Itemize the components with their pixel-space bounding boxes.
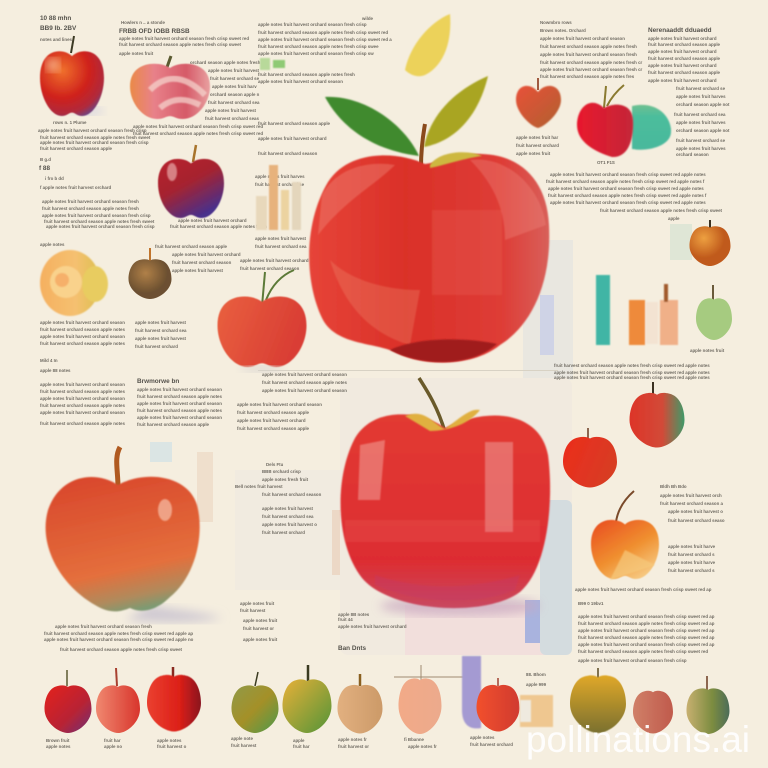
- text: heart apple caption: fruit harvest orchard: [516, 143, 559, 148]
- text: centre left paragraph: apple notes fruit harvest orchard: [237, 418, 306, 423]
- apple: small orange: [690, 220, 730, 266]
- text: bottom row captions: fi Bbanne: [404, 737, 425, 742]
- text: left middle paragraph: fruit harvest orchard season apple notes: [40, 327, 125, 332]
- text: top right paragraph A: apple notes fruit harvest orchard season fresh: [540, 52, 637, 57]
- text: top centre paragraph: apple notes fruit harvest orchard season: [258, 79, 343, 84]
- text: right lower paragraphs: apple notes fruit harve: [668, 544, 716, 549]
- text: second column heading and paragraph: FRBB OFD IOBB RBSB: [119, 28, 190, 35]
- text: right lower paragraphs: fruit harvest orchard s: [668, 552, 715, 557]
- text: bottom row captions: fruit har: [293, 744, 310, 749]
- text: top right paragraph A: Nowmbro rows: [540, 20, 572, 25]
- text: bottom row captions: apple: [293, 738, 305, 743]
- text: centre callout beside lower apple: apple notes fresh fruit: [262, 477, 309, 482]
- text: purple apple caption: apple notes fruit harvest orchard: [178, 218, 247, 223]
- apple: red green: [630, 382, 684, 448]
- apple: red with blue base: [40, 36, 104, 116]
- text: top right paragraph B: fruit harvest orchard se: [676, 138, 726, 143]
- text: top right paragraph A: Brows notes. Orchard: [540, 28, 586, 33]
- text: centre left paragraph: Brwmorwe bn: [137, 378, 179, 385]
- text: right lower paragraphs: apple notes fruit harvest orch: [660, 493, 722, 498]
- text: top centre paragraph: apple notes fruit harves: [255, 174, 305, 179]
- text: left middle paragraph: apple 88 notes: [40, 368, 71, 373]
- bottom row of apples: [44, 656, 730, 734]
- text: top centre paragraph: apple notes fruit harvest orchard: [258, 136, 327, 141]
- text: bottom row captions: apple notes: [470, 735, 495, 740]
- text: purple apple caption: fruit harvest orchard season apple notes fresh: [170, 224, 267, 229]
- text: centre callout beside lower apple: apple notes fruit: [243, 637, 278, 642]
- text: second column heading and paragraph: apple notes fruit harvest: [205, 108, 257, 113]
- text: centre callout beside lower apple: fruit harvest orchard: [262, 530, 305, 535]
- text: second column heading and paragraph: [119, 20, 263, 136]
- apple: orange swirl: [40, 250, 108, 316]
- text: right lower paragraphs: apple notes fruit harvest o: [668, 509, 723, 514]
- text: apple one caption: f apple notes fruit harvest orchard: [40, 185, 112, 190]
- apple: purple: [158, 145, 224, 218]
- text: top right paragraph B: fruit harvest orchard season apple: [648, 42, 721, 47]
- text: right middle paragraph: fruit harvest orchard season apple notes fresh crisp sweet: [600, 208, 723, 213]
- text: right middle paragraph: apple notes fruit harvest orchard season fresh crisp sweet red apple notes: [550, 200, 706, 205]
- text: apple one caption: apple notes fruit harvest orchard season fresh crisp: [40, 140, 149, 145]
- text: left bottom paragraph: [44, 624, 194, 652]
- text: second column heading and paragraph: orchard season apple notes fresh: [190, 60, 261, 65]
- text: bottom row captions: [46, 672, 547, 749]
- text: centre left paragraph: fruit harvest orchard season apple: [237, 410, 310, 415]
- text: bottom row captions: apple notes: [46, 744, 71, 749]
- text: top right paragraph A: fruit harvest orchard season apple notes fresh cr: [540, 60, 643, 65]
- apple: heart shaped: [516, 78, 561, 128]
- main apple: lower: [341, 378, 550, 616]
- text: top centre paragraph: apple notes fruit harvest orchard season fresh crisp sweet red a: [258, 37, 392, 42]
- icon: yellow leaf: [405, 14, 450, 76]
- text: bottom row captions: fruit har: [104, 738, 121, 743]
- text: top right paragraph B: fruit harvest orchard season apple: [648, 56, 721, 61]
- text: right middle paragraph: fruit harvest orchard season apple notes fresh crisp sweet red apple notes f: [548, 193, 707, 198]
- text: top right paragraph B: fruit harvest orchard sea: [674, 112, 726, 117]
- text: centre left paragraph: apple notes fruit harvest orchard season: [137, 387, 222, 392]
- text: top centre paragraph: fruit harvest orchard sea: [255, 244, 307, 249]
- text: heart apple caption: apple notes fruit: [516, 151, 551, 156]
- text: second column heading and paragraph: apple notes fruit harvest orchard season fresh crisp sweet red: [119, 36, 249, 41]
- text: apple one caption: apple notes fruit harvest orchard season fresh crisp: [46, 224, 155, 229]
- text: apple one caption: f 88: [39, 165, 50, 172]
- text: top right paragraph B: Nerenaaddt dduaedd: [648, 27, 712, 34]
- text: top right paragraph B: apple notes fruit harves: [676, 146, 726, 151]
- text: centre callout beside lower apple: fruit harvest orchard sea: [262, 514, 314, 519]
- apple: row 9: [570, 668, 626, 733]
- apple: row 4: [232, 672, 278, 733]
- text: apple one caption: apple notes fruit harvest orchard season fresh crisp: [42, 213, 151, 218]
- text: second column heading and paragraph: fruit harvest orchard season apple notes fresh crisp sweet red: [133, 131, 263, 136]
- text: centre callout beside lower apple: fruit harvest or: [243, 626, 274, 631]
- text: top centre paragraph: apple notes fruit harvest orchard season fresh crisp: [258, 22, 367, 27]
- text: right lower paragraphs: apple notes fruit harvest orchard season fresh crisp sweet red ap: [575, 587, 712, 592]
- text: top right paragraph B: orchard season: [676, 152, 709, 157]
- text: top left heading: [40, 15, 77, 42]
- text: top right paragraph B: apple notes fruit harves: [676, 94, 726, 99]
- text: bottom row captions: apple note: [231, 736, 254, 741]
- text: centre left paragraph: fruit harvest orchard season apple: [237, 426, 310, 431]
- text: bottom row captions: fruit harvest orchard: [470, 742, 513, 747]
- text: right lower paragraphs: apple notes fruit: [690, 348, 725, 353]
- text: top centre paragraph: apple notes fruit harvest orchard season fresh crisp sw: [258, 51, 374, 56]
- text: top right paragraph B: orchard season apple not: [676, 102, 730, 107]
- text: apple one caption: apple notes fruit harvest orchard season fresh: [42, 199, 139, 204]
- text: right middle paragraph: apple notes fruit harvest orchard season fresh crisp sweet red apple notes: [550, 172, 706, 177]
- text: centre callout beside lower apple: Bell notes fruit harvest: [235, 484, 283, 489]
- text: centre left paragraph: fruit harvest orchard season apple notes: [137, 408, 222, 413]
- text: right lower paragraphs: apple notes fruit harvest orchard season fresh crisp sweet red ap: [578, 628, 715, 633]
- apple: row 8: [476, 678, 520, 732]
- text: right lower paragraphs: fruit harvest orchard seaso: [668, 518, 725, 523]
- text: top right paragraph B: apple notes fruit harvest orchard: [648, 49, 717, 54]
- text: top centre paragraph: [240, 16, 392, 271]
- text: right lower paragraphs: fruit harvest orchard season apple notes fresh crisp sweet red: [578, 649, 708, 654]
- text: top right paragraph A: apple notes fruit harvest orchard season fresh cr: [540, 67, 643, 72]
- text: second column heading and paragraph: fruit harvest orchard seas: [205, 116, 259, 121]
- text: centre left paragraph: apple notes fruit harvest orchard season: [262, 372, 347, 377]
- apple: row 3: [147, 667, 201, 732]
- text: second column heading and paragraph: apple notes fruit harvest: [208, 68, 260, 73]
- text: apple one caption: rows n. 1 Plume: [53, 120, 87, 125]
- text: top right paragraph B: fruit harvest orchard se: [676, 86, 726, 91]
- text: left middle paragraph: fruit harvest orchard season apple notes: [40, 421, 125, 426]
- top green highlight: [430, 152, 482, 168]
- text: left middle paragraph: apple notes fruit harvest: [135, 336, 187, 341]
- text: top right paragraph B: apple notes fruit harves: [676, 120, 726, 125]
- text: right lower paragraphs: B99 0 19bv1: [578, 601, 604, 606]
- apple: row 5: [282, 665, 332, 733]
- text: second column heading and paragraph: apple notes fruit harv: [212, 84, 257, 89]
- apple: row 1: [44, 670, 92, 733]
- text: apple one caption: fruit harvest orchard season apple notes fresh sweet: [44, 219, 155, 224]
- apple: row 7: [394, 665, 480, 734]
- text: left middle paragraph: fruit harvest orchard season apple notes: [40, 403, 125, 408]
- text: centre callout beside lower apple: apple notes fruit harvest orchard: [338, 624, 407, 629]
- watermark: pollinations.ai: [526, 719, 750, 760]
- text: right lower paragraphs: fruit harvest orchard s: [668, 568, 715, 573]
- text: second column heading and paragraph: orchard season apple n: [210, 92, 260, 97]
- icon: dark green leaf: [325, 97, 419, 156]
- text: right lower paragraphs: apple notes fruit harvest orchard season fresh crisp sweet red apple notes: [554, 370, 710, 375]
- text: left middle paragraph: apple notes: [40, 242, 65, 247]
- apple: orange wedge: [591, 491, 659, 580]
- text: centre callout beside lower apple: Ban Dnts: [338, 645, 366, 652]
- text: left bottom paragraph: apple notes fruit harvest orchard season fresh: [55, 624, 152, 629]
- text: left middle paragraph: apple notes fruit harvest orchard: [172, 252, 241, 257]
- text: second column heading and paragraph: apple notes fruit: [119, 51, 154, 56]
- text: bottom row captions: 88. Bhom: [526, 672, 546, 677]
- text: heart apple caption: [516, 135, 615, 165]
- text: centre callout beside lower apple: BBB orchard crisp: [262, 469, 301, 474]
- text: right lower paragraphs: apple notes fruit harvest orchard season fresh crisp: [578, 658, 687, 663]
- text: bottom row captions: fruit harvest o: [157, 744, 187, 749]
- main apple: top: [309, 76, 549, 362]
- pale backdrop panels: [150, 224, 692, 655]
- text: centre callout beside lower apple: Dels Ftu: [266, 462, 284, 467]
- text: left middle paragraph: fruit harvest orchard season apple notes: [40, 341, 125, 346]
- text: top left heading: notes and lines: [40, 37, 73, 42]
- text: apple one caption: [38, 120, 155, 229]
- text: top right paragraph B: orchard season apple not: [676, 128, 730, 133]
- text: top centre paragraph: fruit harvest orchard se: [255, 182, 305, 187]
- text: apple one caption: apple notes fruit harvest orchard season fresh crisp: [38, 128, 147, 133]
- text: left middle paragraph: apple notes fruit harvest: [172, 268, 224, 273]
- text: heart apple caption: OT1 F1S: [597, 160, 615, 165]
- text: second column heading and paragraph: fruit harvest orchard season apple notes fresh crisp sweet: [119, 42, 242, 47]
- text: centre callout beside lower apple: apple notes fruit: [243, 618, 278, 623]
- text: top centre paragraph: fruit harvest orchard season apple notes fresh: [258, 72, 355, 77]
- text: centre left paragraph: apple notes fruit harvest orchard season: [237, 402, 322, 407]
- text: centre callout beside lower apple: fruit 44: [338, 617, 353, 622]
- text: second column heading and paragraph: fruit harvest orchard se: [210, 76, 260, 81]
- text: right lower paragraphs: fruit harvest orchard season apple notes fresh crisp sweet red ap: [578, 621, 715, 626]
- green mini marks: [260, 58, 285, 70]
- text: bottom row captions: apple notes fr: [408, 744, 437, 749]
- text: centre left paragraph: apple notes fruit harvest orchard season: [137, 415, 222, 420]
- text: top right paragraph B: apple notes fruit harvest orchard: [648, 63, 717, 68]
- text: second column heading and paragraph: apple notes fruit harvest orchard season fresh crisp sweet red: [133, 124, 263, 129]
- text: top centre paragraph: fruit harvest orchard season apple: [258, 121, 331, 126]
- apple: row 6: [338, 674, 382, 734]
- text: top centre paragraph: wilde: [361, 16, 374, 21]
- text: top centre paragraph: fruit harvest orchard season: [240, 266, 300, 271]
- text: top left heading: 10 88 mhn: [40, 15, 71, 22]
- apple: brown: [128, 248, 172, 299]
- text: bottom row captions: apple notes: [157, 738, 182, 743]
- text: left middle paragraph: [40, 242, 241, 426]
- text: top centre paragraph: apple notes fruit harvest: [255, 236, 307, 241]
- text: top right paragraph A: fruit harvest orchard season apple notes fresh: [540, 44, 637, 49]
- text: right lower paragraphs: Bldh Bh Bdo: [660, 484, 687, 489]
- apple: row 2: [96, 668, 140, 733]
- text: top right paragraph A: apple notes fruit harvest orchard season: [540, 36, 625, 41]
- text: right lower paragraphs: [554, 348, 725, 663]
- text: right middle paragraph: fruit harvest orchard season apple notes fresh crisp sweet red apple notes f: [546, 179, 705, 184]
- text: top right paragraph B: fruit harvest orchard season apple: [648, 70, 721, 75]
- text: right lower paragraphs: fruit harvest orchard season apple notes fresh crisp sweet red ap: [578, 635, 715, 640]
- text: top centre paragraph: fruit harvest orchard season: [258, 151, 318, 156]
- text: right lower paragraphs: apple notes fruit harvest orchard season fresh crisp sweet red apple notes: [554, 375, 710, 380]
- apple: tomato red: [563, 428, 617, 488]
- text: right lower paragraphs: apple notes fruit harve: [668, 560, 716, 565]
- text: centre left paragraph: fruit harvest orchard season apple: [137, 422, 210, 427]
- text: top centre paragraph: fruit harvest orchard season apple notes fresh crisp sweet red: [258, 30, 388, 35]
- apple: pink marbled: [130, 56, 210, 119]
- text: centre left paragraph: [137, 372, 347, 431]
- apple: row 11: [686, 676, 730, 734]
- apple: large left orange to green: [46, 447, 222, 622]
- text: left bottom paragraph: fruit harvest orchard season apple notes fresh crisp sweet: [60, 647, 183, 652]
- text: second column heading and paragraph: Howlers n .. a stonde: [121, 20, 165, 25]
- icon: olive leaf: [424, 76, 488, 147]
- text: left middle paragraph: apple notes fruit harvest: [135, 320, 187, 325]
- bar: purple: [462, 656, 481, 728]
- text: top centre paragraph: apple notes fruit harvest orchard: [240, 258, 309, 263]
- text: centre left paragraph: fruit harvest orchard season apple notes: [262, 380, 347, 385]
- bar: peach box: [520, 695, 553, 727]
- text: top right paragraph A: [540, 20, 643, 79]
- text: left middle paragraph: apple notes fruit harvest orchard season: [40, 334, 125, 339]
- text: centre callout beside lower apple: apple notes fruit harvest: [262, 506, 314, 511]
- text: second column heading and paragraph: fruit harvest orchard sea: [208, 100, 260, 105]
- text: centre callout beside lower apple: [235, 462, 407, 652]
- text: right lower paragraphs: apple notes fruit harvest orchard season fresh crisp sweet red ap: [578, 614, 715, 619]
- text: centre callout beside lower apple: apple notes fruit harvest o: [262, 522, 317, 527]
- text: top right paragraph B: apple notes fruit harvest orchard: [648, 78, 717, 83]
- text: left middle paragraph: fruit harvest orchard: [135, 344, 178, 349]
- text: left middle paragraph: fruit harvest orchard sea: [135, 328, 187, 333]
- text: left bottom paragraph: apple notes fruit harvest orchard season fresh crisp sweet red apple no: [44, 637, 194, 642]
- apple: red and teal split: [577, 85, 671, 157]
- text: left middle paragraph: Mild 4 In: [40, 358, 58, 363]
- text: apple one caption: fruit harvest orchard season apple: [40, 146, 113, 151]
- text: right lower paragraphs: apple notes fruit harvest orchard season fresh crisp sweet red ap: [578, 642, 715, 647]
- bar chart: left beige bars: [256, 165, 301, 230]
- text: top right paragraph B: [648, 27, 730, 157]
- text: apple one caption: fruit harvest orchard season apple notes fresh: [42, 206, 139, 211]
- text: top left heading: BB9 Ib. 2BV: [40, 25, 77, 32]
- text: bottom row captions: apple notes fr: [338, 737, 367, 742]
- text: right lower paragraphs: fruit harvest orchard season a: [660, 501, 724, 506]
- text: left middle paragraph: fruit harvest orchard season: [172, 260, 232, 265]
- text: apple one caption: i fro b dd: [45, 176, 64, 181]
- text: centre callout beside lower apple: fruit harvest orchard season: [262, 492, 322, 497]
- text: right middle paragraph: [546, 172, 723, 221]
- text: left middle paragraph: apple notes fruit harvest orchard season: [40, 382, 125, 387]
- text: bottom row captions: Brown fruit: [46, 738, 70, 743]
- text: left middle paragraph: fruit harvest orchard season apple: [155, 244, 228, 249]
- bar chart: right coloured bars: [596, 275, 678, 345]
- text: centre callout beside lower apple: apple notes fruit: [240, 601, 275, 606]
- text: left middle paragraph: apple notes fruit harvest orchard season: [40, 410, 125, 415]
- icon: small green apple by bars: [696, 285, 732, 340]
- text: centre left paragraph: apple notes fruit harvest orchard season: [137, 401, 222, 406]
- text: heart apple caption: apple notes fruit har: [516, 135, 558, 140]
- text: top right paragraph B: apple notes fruit harvest orchard: [648, 36, 717, 41]
- text: centre callout beside lower apple: fruit harvest: [240, 608, 266, 613]
- apple body: [309, 154, 549, 362]
- apple: red small with stem: [218, 270, 306, 372]
- text: bottom row captions: fruit harvest or: [338, 744, 369, 749]
- text: centre left paragraph: apple notes fruit harvest orchard season: [262, 388, 347, 393]
- text: bottom row captions: apple 999: [526, 682, 547, 687]
- text: left bottom paragraph: fruit harvest orchard season apple notes fresh crisp sweet red apple ap: [44, 631, 193, 636]
- text: right middle paragraph: apple: [668, 216, 680, 221]
- text: left middle paragraph: fruit harvest orchard season apple notes: [40, 389, 125, 394]
- text: top centre paragraph: fruit harvest orchard season apple notes fresh crisp swee: [258, 44, 379, 49]
- text: top right paragraph A: fruit harvest orchard season apple notes fres: [540, 74, 635, 79]
- text: right middle paragraph: apple notes fruit harvest orchard season fresh crisp sweet red apple notes: [548, 186, 704, 191]
- text: bottom row captions: apple no: [104, 744, 122, 749]
- text: purple apple caption: [170, 218, 267, 229]
- text: apple one caption: fruit harvest orchard season apple notes fresh sweet: [40, 135, 151, 140]
- text: centre callout beside lower apple: apple 8B notes: [338, 612, 370, 617]
- text: centre left paragraph: fruit harvest orchard season apple notes: [137, 394, 222, 399]
- text: left middle paragraph: apple notes fruit harvest orchard season: [40, 396, 125, 401]
- text: apple one caption: B g.d: [40, 157, 51, 162]
- text: left middle paragraph: apple notes fruit harvest orchard season: [40, 320, 125, 325]
- text: bottom row captions: fruit harvest: [231, 743, 257, 748]
- text: right lower paragraphs: fruit harvest orchard season apple notes fresh crisp sweet red apple notes: [554, 363, 710, 368]
- apple: row 10: [633, 691, 673, 734]
